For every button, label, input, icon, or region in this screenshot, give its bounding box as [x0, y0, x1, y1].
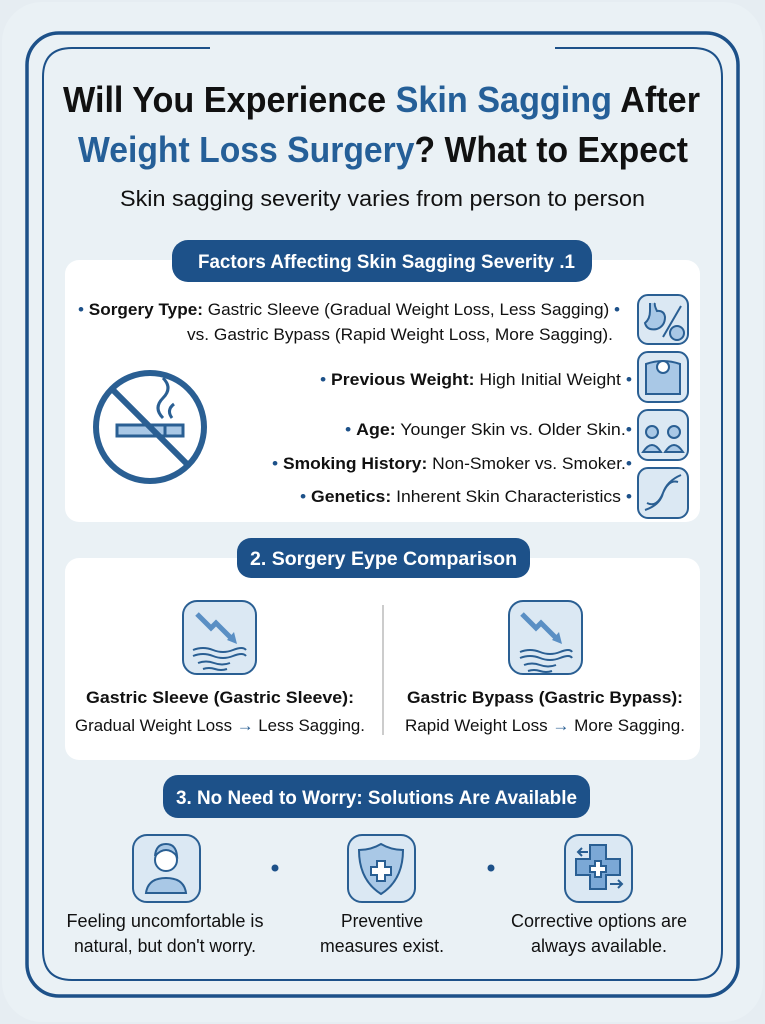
text: gastric bypass: Gastric Bypass (Gastric Bypass): [407, 688, 683, 707]
icon: stomach/clock [638, 295, 688, 344]
heading: section 2 [237, 538, 530, 578]
title: Will You Experience Skin Sagging After [63, 79, 700, 120]
text: solutions: Corrective options are [511, 911, 687, 931]
factor list: • Age: Younger Skin vs. Older Skin. • [345, 420, 632, 439]
text: gastric bypass: Rapid Weight Loss → More Sagging. [405, 716, 685, 735]
icon: rapid decline [509, 601, 582, 674]
icon: person [133, 835, 200, 902]
factor list: vs. Gastric Bypass (Rapid Weight Loss, More Sagging). [187, 325, 613, 344]
factor list: • Sorgery Type: Gastric Sleeve (Gradual Weight Loss, Less Sagging) • [78, 300, 620, 319]
text: solutions: Feeling uncomfortable is [66, 911, 264, 931]
text: gastric sleeve: Gradual Weight Loss → Less Sagging. [75, 716, 365, 735]
panel: comparison [65, 538, 700, 760]
heading: section 1 [172, 240, 592, 282]
heading: section 1: Factors Affecting Skin Sagging Severity .1 [198, 252, 575, 273]
icon: scale [638, 352, 688, 402]
text: solutions [66, 911, 687, 956]
heading: section 3: 3. No Need to Worry: Solutions Are Available [176, 788, 577, 809]
icon: medical cross arrows [565, 835, 632, 902]
icon: no smoking [96, 373, 204, 481]
text: gastric bypass [405, 688, 685, 735]
text: solutions: always available. [531, 936, 667, 956]
text: solutions: natural, but don't worry. [74, 936, 256, 956]
title: Weight Loss Surgery? What to Expect [78, 129, 688, 170]
icon: shield [348, 835, 415, 902]
icon: people [638, 410, 688, 460]
heading: section 2: 2. Sorgery Eype Comparison [250, 549, 517, 570]
text: gastric sleeve: Gastric Sleeve (Gastric Sleeve): [86, 688, 354, 707]
icon: DNA [638, 468, 688, 518]
factor list: • Genetics: Inherent Skin Characteristics • [300, 487, 632, 506]
heading: section 3 [163, 775, 590, 818]
dot [272, 864, 278, 872]
text: solutions: Preventive [341, 911, 423, 931]
text: solutions: measures exist. [320, 936, 444, 956]
divider [382, 605, 384, 735]
panel: factors [65, 240, 700, 522]
factor list [78, 300, 632, 506]
text: gastric sleeve [75, 688, 365, 735]
factor list: • Previous Weight: High Initial Weight • [320, 370, 632, 389]
factor list: • Smoking History: Non-Smoker vs. Smoker. • [272, 454, 632, 473]
subtitle: Skin sagging severity varies from person to person [120, 186, 645, 211]
icon: gradual decline [183, 601, 256, 674]
title [63, 79, 700, 170]
dot [488, 864, 494, 872]
